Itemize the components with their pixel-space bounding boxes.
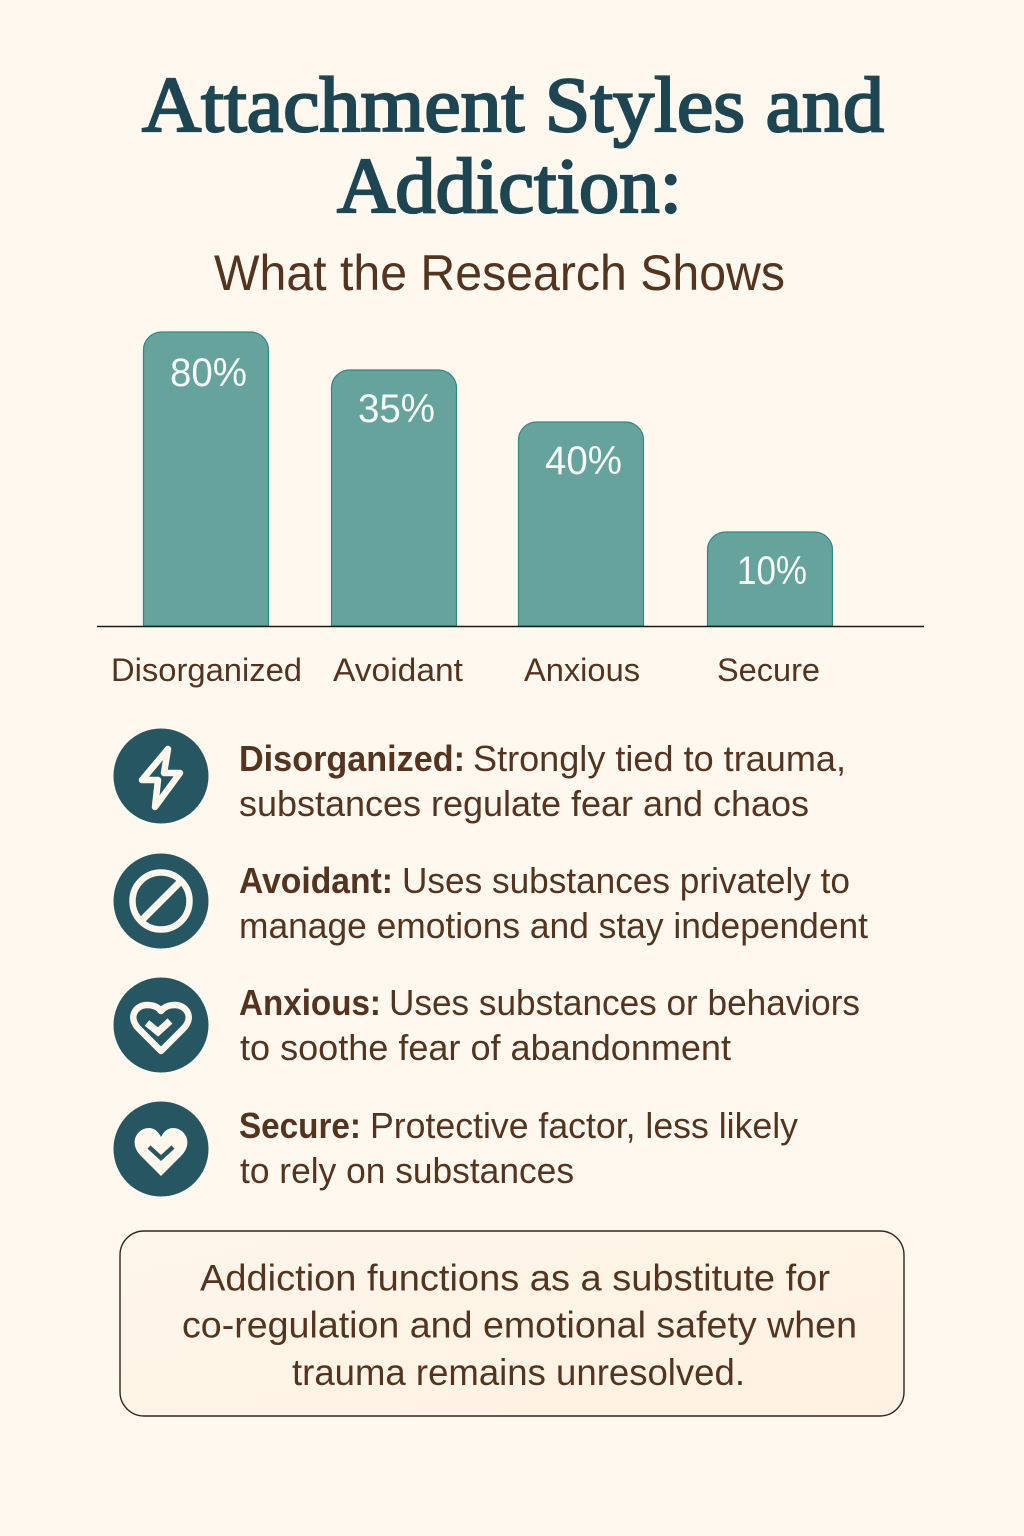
icon: heart outline with check <box>114 978 208 1072</box>
text: Disorganized: Disorganized: <box>239 738 465 779</box>
bar: Disorganized 80% <box>144 332 268 626</box>
title <box>142 61 884 229</box>
text: Secure: Secure: <box>239 1105 361 1146</box>
icon: lightning bolt <box>114 728 208 824</box>
bar chart <box>97 332 924 688</box>
text: Anxious <box>239 982 860 1068</box>
text: Disorganized <box>239 738 846 824</box>
text: Anxious: Uses substances or behaviors <box>389 982 860 1023</box>
subtitle: What the Research Shows <box>214 245 785 301</box>
axis labels: Secure <box>717 652 820 688</box>
text: Anxious: Anxious: <box>239 982 381 1023</box>
text: Avoidant: manage emotions and stay independent <box>239 905 868 946</box>
title: Attachment Styles and <box>142 61 884 148</box>
text: Anxious: to soothe fear of abandonment <box>240 1027 731 1068</box>
axis labels <box>111 652 820 688</box>
axis labels: Disorganized <box>111 652 302 688</box>
callout: co-regulation and emotional safety when <box>182 1304 857 1346</box>
text: Avoidant: Avoidant: <box>239 860 393 901</box>
bar: Anxious 40%: 40% <box>545 439 622 483</box>
bar: Avoidant 35% <box>332 370 456 626</box>
axis labels: Anxious <box>524 652 640 688</box>
bar: Secure 10% <box>708 532 832 626</box>
title: Addiction: <box>337 142 682 229</box>
text: Secure <box>239 1105 798 1191</box>
text: Avoidant <box>239 860 868 946</box>
callout <box>120 1231 904 1416</box>
text: Disorganized: Strongly tied to trauma, <box>473 738 846 779</box>
bar: Secure 10%: 10% <box>737 549 807 593</box>
axis labels: Avoidant <box>333 652 463 688</box>
text: Secure: to rely on substances <box>240 1150 574 1191</box>
text: Secure: Protective factor, less likely <box>370 1105 798 1146</box>
callout: Addiction functions as a substitute for <box>200 1258 830 1298</box>
icon: prohibition sign <box>114 854 208 948</box>
callout: trauma remains unresolved. <box>292 1352 745 1393</box>
text: Avoidant: Uses substances privately to <box>402 860 850 901</box>
bar: Avoidant 35%: 35% <box>358 387 435 431</box>
icon: solid heart with check <box>114 1102 208 1196</box>
bar: Anxious 40% <box>518 422 644 626</box>
bar: Disorganized 80%: 80% <box>170 351 247 395</box>
text: Disorganized: substances regulate fear and chaos <box>239 783 809 824</box>
